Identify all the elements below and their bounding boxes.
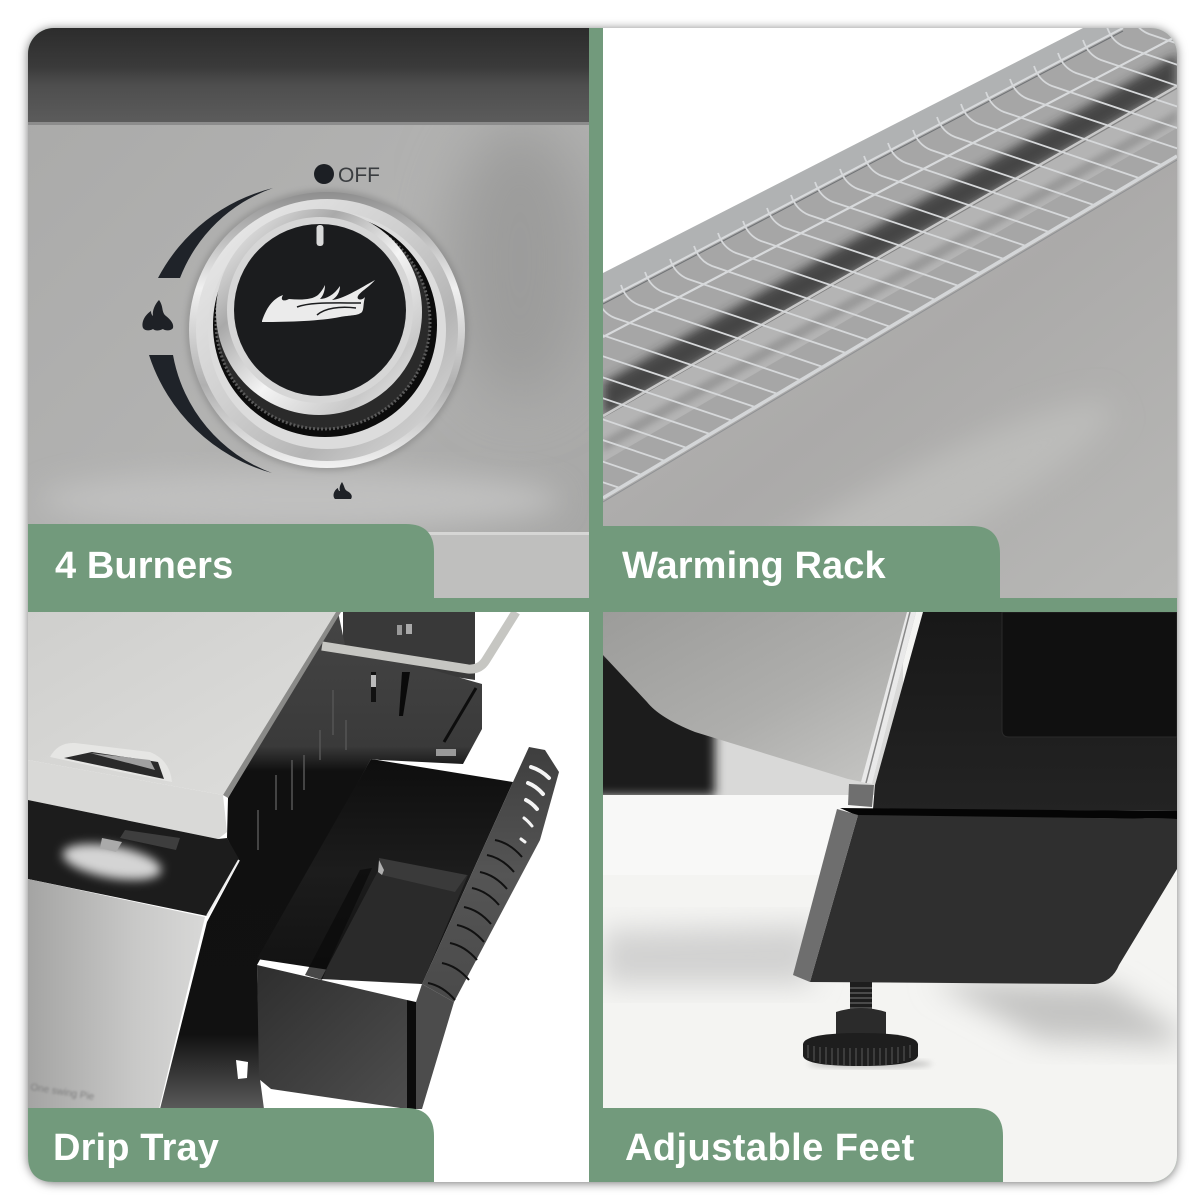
black cabinet [873,612,1177,811]
ribbed flap [422,747,559,1002]
foot [793,809,1177,1068]
divider grid [589,28,603,1182]
icon: off marker [314,164,380,184]
panel: adjustable feet [560,612,1177,1182]
handle [322,612,516,669]
background blur [603,664,903,795]
gap [840,808,1177,819]
icon: flame logo [262,280,375,322]
rack lower reflection band [603,89,1177,462]
icon: burner dial arc [149,188,273,473]
label: Adjustable Feet [603,1108,1003,1182]
label: Adjustable Feet: Adjustable Feet [625,1127,915,1169]
rack interior [603,28,1177,498]
notch [236,1060,248,1079]
icon: off marker: OFF [338,164,380,187]
steel side [603,156,1177,598]
grill hood [28,612,341,839]
chart: wire rack [603,28,1177,502]
icon: low flame [334,482,352,499]
icon: burner knob [186,189,468,471]
steel side panel [603,612,916,784]
corner block [848,784,874,807]
icon: adjustment knob [803,1008,932,1068]
black side panel [160,612,482,1109]
label: Warming Rack: Warming Rack [622,545,887,587]
panel: warming rack [603,28,1177,598]
bracket slots [258,624,476,850]
rack back wall [603,28,1130,303]
screw [850,982,872,1012]
icon: high flame [142,300,173,330]
label: 4 Burners: 4 Burners [55,545,233,587]
floor shadows [603,795,724,806]
label: Drip Tray [28,1108,434,1182]
cabinet recess [1002,612,1177,737]
label: Drip Tray: Drip Tray [53,1127,219,1169]
grill door: One swing Pie [30,1082,95,1103]
rack dark shadow band [603,54,1177,417]
firebox gap [28,800,239,916]
label: 4 Burners [28,524,434,598]
label: Warming Rack [603,526,1000,598]
panel: 4 burners [28,28,590,598]
hood handle [50,743,172,782]
drip tray body [257,747,559,1109]
rear bracket [343,612,475,680]
grill door [28,860,239,1109]
panel: drip tray [28,612,589,1182]
